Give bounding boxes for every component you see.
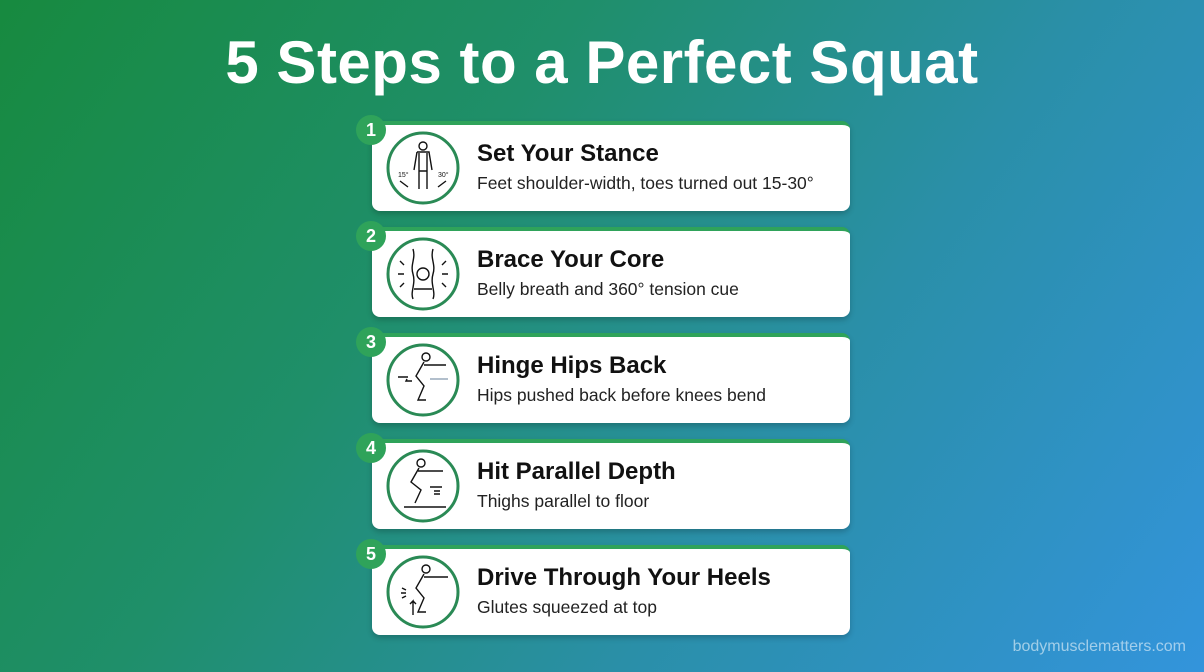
card: step 5 [372,545,850,635]
heading: Hinge Hips Back [477,352,666,379]
description: Glutes squeezed at top [477,597,657,617]
heading: Set Your Stance [477,140,659,167]
description: Belly breath and 360° tension cue [477,279,739,299]
badge 1: 1 [366,120,376,140]
heading: Brace Your Core [477,246,664,273]
badge 1 [356,115,386,145]
icon: drive up [386,556,460,628]
badge 2 [356,221,386,251]
badge 5: 5 [366,544,376,564]
icon: standing figure: 30° [438,171,449,179]
icon: standing figure: 15° [398,171,409,179]
icon: hip hinge [386,344,460,416]
card: step 3 [372,333,850,423]
card: step 1 [372,121,850,211]
icon: standing figure [386,132,460,204]
card: step 2 [372,227,850,317]
card: step 4 [372,439,850,529]
icon: core brace [386,238,460,310]
heading: Drive Through Your Heels [477,564,771,591]
badge 3 [356,327,386,357]
description: Thighs parallel to floor [477,491,649,511]
description: Hips pushed back before knees bend [477,385,766,405]
watermark: bodymusclematters.com [1013,638,1186,655]
description: Feet shoulder-width, toes turned out 15-30° [477,173,814,193]
heading: Hit Parallel Depth [477,458,676,485]
icon: parallel depth [386,450,460,522]
badge 5 [356,539,386,569]
badge 3: 3 [366,332,376,352]
badge 4 [356,433,386,463]
badge 2: 2 [366,226,376,246]
badge 4: 4 [366,438,376,458]
title: 5 Steps to a Perfect Squat [225,29,979,96]
